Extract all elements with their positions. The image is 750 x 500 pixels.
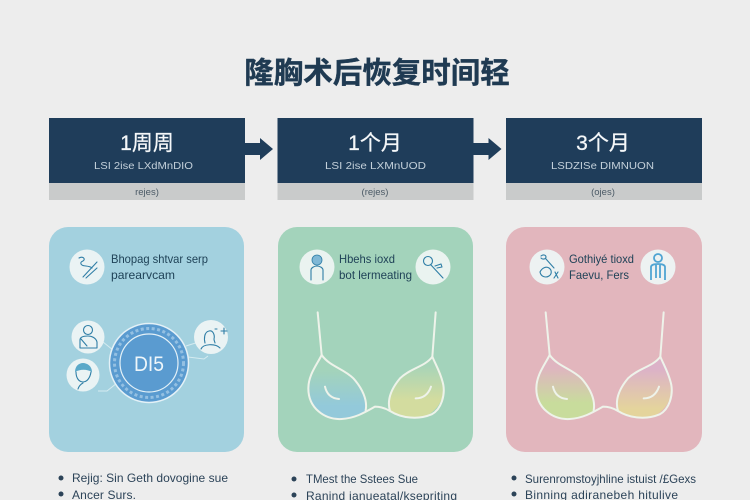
icon: standing figure (640, 250, 676, 284)
bullet list: first month: TMest the Sstees Sue (306, 472, 418, 486)
timeline header: 1 month: 1个月 (348, 132, 402, 155)
timeline header: 1 month: (rejes) (362, 187, 388, 198)
timeline header: 1 week: rejes) (135, 187, 159, 198)
timeline header: 1 month: LSI 2ise LXMnUOD (325, 160, 426, 172)
panel text (569, 252, 634, 282)
timeline header: 1 week (49, 118, 245, 200)
icon: person with plus (194, 320, 228, 354)
timeline header: 3 months: (ojes) (591, 187, 615, 198)
icon: magnifier tool (416, 250, 450, 284)
timeline header: 3 months: 3个月 (576, 132, 630, 155)
timeline header: 3 months (506, 118, 702, 200)
timeline header: 1 week: LSI 2ise LXdMnDIO (94, 160, 193, 172)
panel text: Gothiyé tioxd (569, 252, 634, 266)
panel text (339, 252, 412, 282)
illustration: implant outline (536, 312, 672, 419)
connector lines (98, 340, 208, 391)
panel text: Faevu, Fers (569, 268, 629, 282)
panel text: Hbehs ioxd (339, 252, 395, 266)
icon: hand and flowers (530, 250, 564, 284)
arrow: 1 month to 3 months (474, 138, 502, 160)
icon: instruments (70, 250, 104, 284)
icon: person with bandage (72, 320, 104, 354)
bullet list: third month (512, 472, 696, 500)
timeline header: 3 months: LSDZISe DIMNUON (551, 160, 654, 172)
panel text: Bhopag shtvar serp (111, 252, 208, 266)
bullet list: first month (292, 472, 457, 500)
icon: person with cap (66, 358, 100, 392)
bullet list: first week: Rejig: Sin Geth dovogine sue (72, 471, 228, 485)
panel text: parearvcam (111, 268, 175, 282)
bullet list: third month: Surenromstoyjhline istuist /£Gexs (525, 472, 696, 486)
panel: first week (49, 227, 244, 452)
panel text: bot lermeating (339, 268, 412, 282)
icon: person (300, 250, 334, 284)
title: 隆胸术后恢复时间轻 (244, 57, 510, 90)
panel: third month (506, 227, 702, 452)
panel: first month (278, 227, 473, 452)
illustration: implant outline (308, 312, 444, 419)
panel text (111, 252, 208, 282)
badge: central seal (110, 324, 188, 402)
timeline header: 1 week: 1周周 (120, 132, 174, 155)
arrow: 1 week to 1 month (245, 138, 273, 160)
badge: central seal: DI5 (134, 353, 164, 376)
timeline header: 1 month (278, 118, 474, 200)
bullet list: first week (58, 471, 228, 500)
